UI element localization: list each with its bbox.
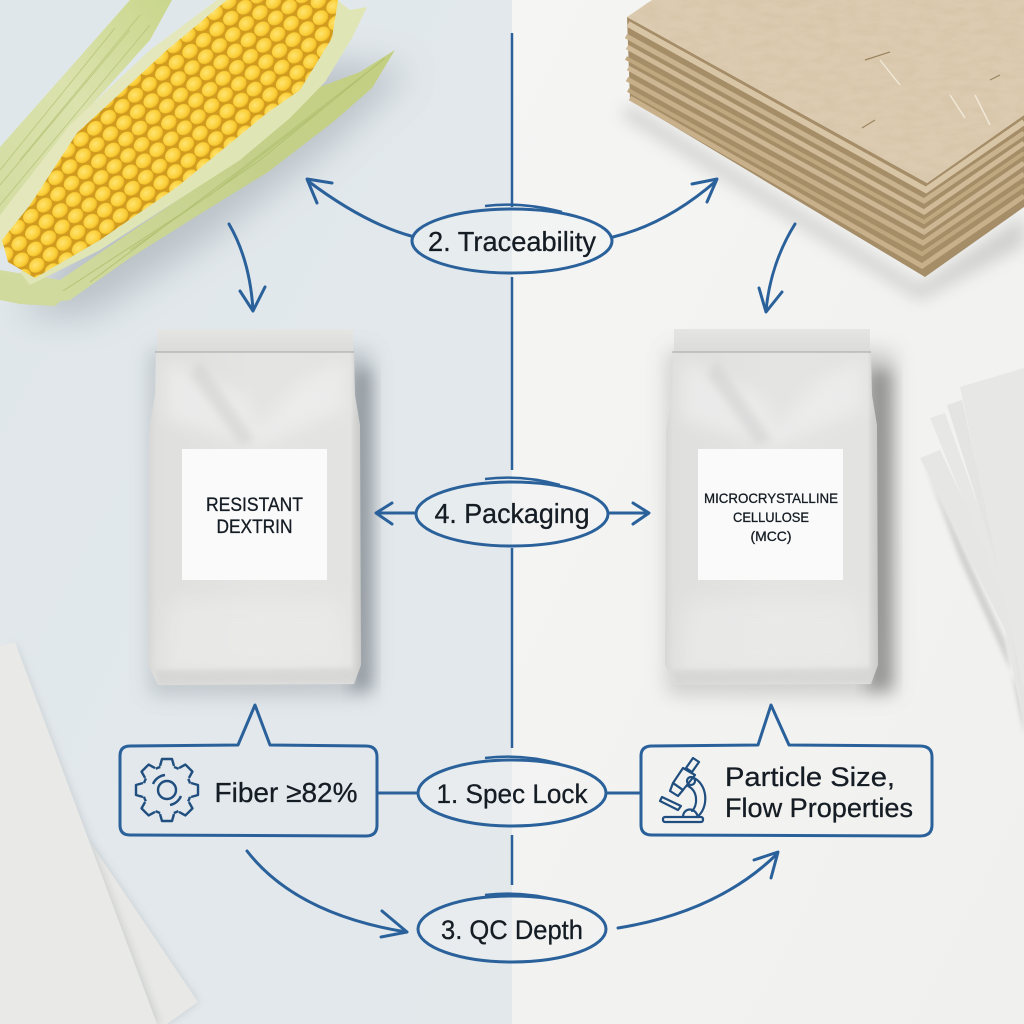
stack top sheet [627,0,1024,183]
oval: 1. Spec Lock: 1. Spec Lock [436,779,588,809]
stack shadow [620,105,1024,300]
corn cob with husk [0,0,410,315]
bag shadow [150,350,372,695]
bag label: DEXTRIN [216,517,292,538]
arrow: traceability to corn [307,179,411,236]
callout: Particle size: Particle Size, [725,762,895,792]
kernels [2,0,338,278]
arrow: corn to bag [229,224,265,311]
bag label: CELLULOSE [733,509,809,525]
oval: 4. Packaging [416,478,608,546]
bag top fold [674,329,870,352]
husk: back left leaf [0,0,172,225]
oval: 4. Packaging: 4. Packaging [434,498,590,529]
icon: gear [136,759,198,821]
husk base wrap [0,272,70,306]
bag label [182,449,327,580]
arrow: fiber to QC depth [247,851,407,937]
oval: 3. QC Depth [418,894,606,962]
callout: Particle size: Flow Properties [725,793,913,823]
husk: lower right leaf [0,50,395,305]
oval: 3. QC Depth: 3. QC Depth [441,915,583,945]
stack sides [627,17,1024,277]
callout: Fiber: Fiber ≥82% [214,777,358,808]
oval: 2. Traceability [412,205,612,273]
background: right panel [512,0,1024,1024]
callout: Particle size [641,705,932,836]
bag label [698,449,843,580]
fibre sheet stack [620,0,1024,300]
arrow: QC depth to particle size [618,852,778,928]
bag body [665,352,878,685]
corn shadow [20,60,410,315]
bag shadow [667,350,895,695]
oval: 2. Traceability: 2. Traceability [428,226,596,257]
bag label: RESISTANT [206,495,303,516]
background: left panel [0,0,512,1024]
bag top fold [157,329,353,352]
husk: dark inner shade [190,90,333,190]
arrow: fibre to bag [759,224,795,312]
bag: Resistant Dextrin [148,329,372,695]
arrow: packaging to left bag [376,503,415,524]
husk: inner leaf band [0,0,240,250]
bag body [148,352,361,685]
callout: Fiber [120,705,377,836]
bag: Microcrystalline Cellulose [665,329,895,695]
husk: upper right leaf tip [20,0,367,285]
arrow: packaging to right bag [609,503,649,524]
icon: microscope [660,758,705,822]
connector lines [378,792,641,794]
center divider line [511,33,513,885]
paper sheets bottom-left [0,642,198,1024]
oval: 1. Spec Lock [418,757,606,826]
bag label: MICROCRYSTALLINE [704,490,838,506]
paper sheets right [920,368,1024,735]
arrow: traceability to fibre [613,179,717,237]
bag label: (MCC) [750,528,792,544]
